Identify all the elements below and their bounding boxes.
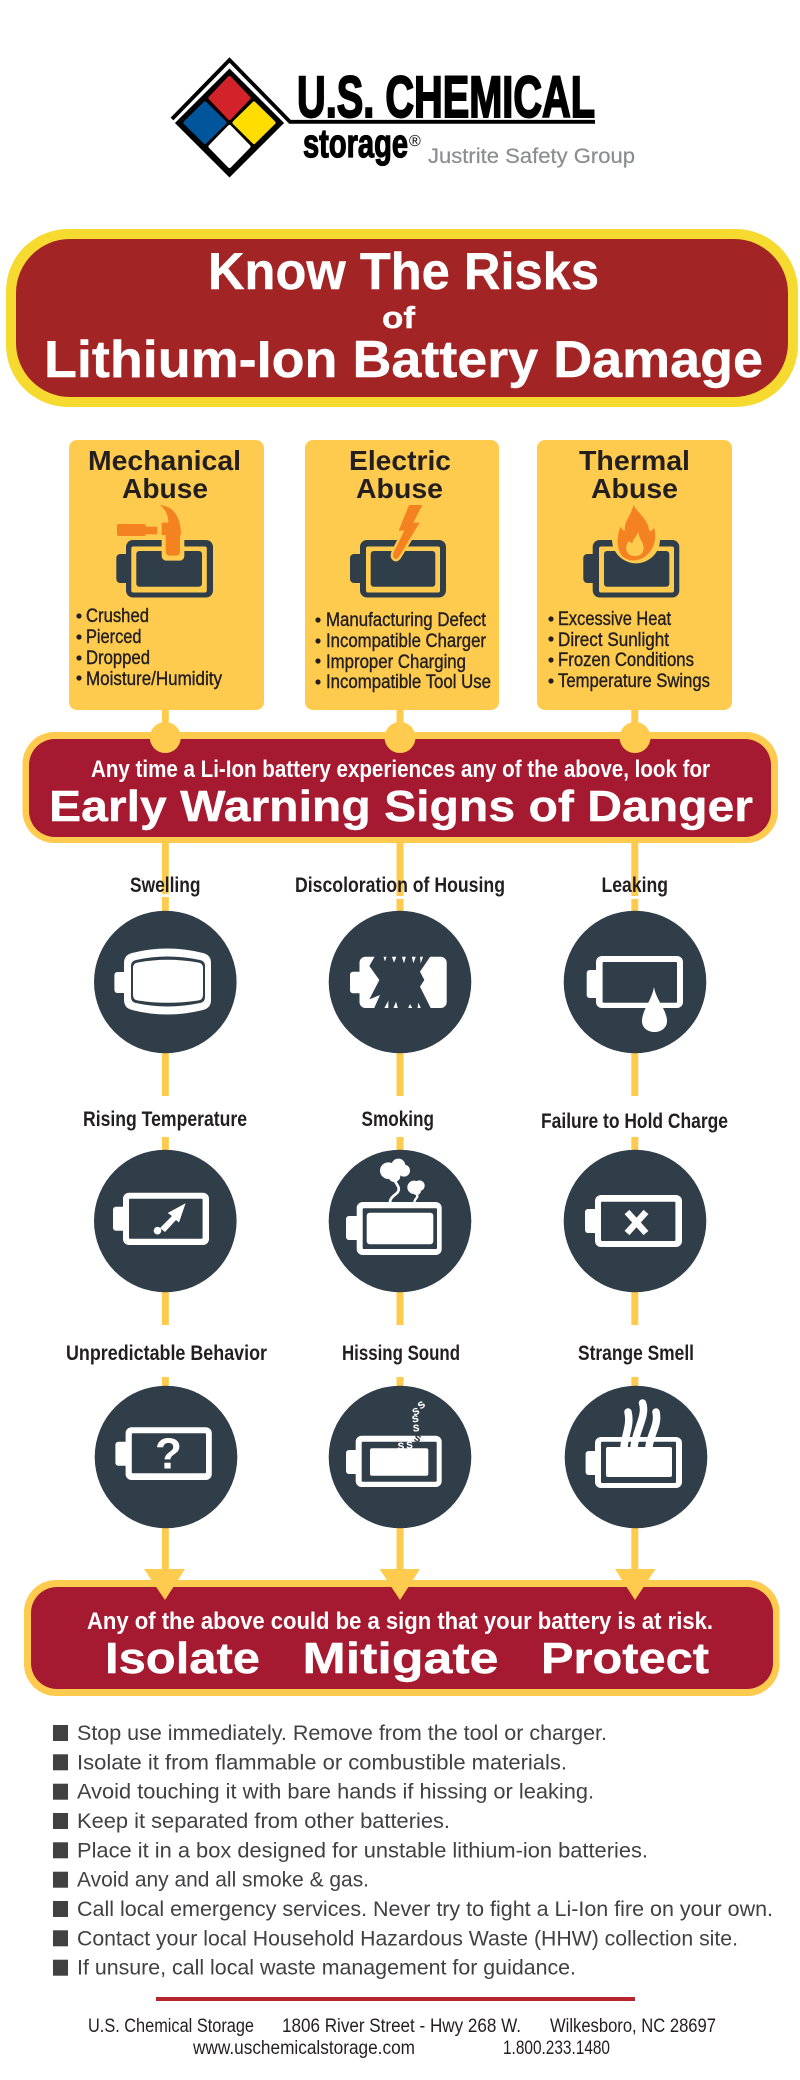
item 6: Avoid any and all smoke & gas. — [77, 1868, 369, 1892]
item 7: Call local emergency services. Never try to fight a Li-Ion fire on your own. — [77, 1897, 773, 1921]
banner: early warning signs — [22, 722, 778, 843]
connector dot right — [620, 722, 650, 753]
icon: hissing battery — [346, 1397, 442, 1487]
heading line 2: Abuse — [122, 473, 208, 504]
item 9: If unsure, call local waste management for guidance. — [77, 1956, 576, 1980]
list — [315, 609, 491, 693]
action: mitigate: Mitigate — [302, 1634, 498, 1683]
icon circle — [329, 911, 471, 1053]
arrow centre — [380, 1569, 420, 1600]
list: Incompatible Tool Use — [326, 671, 491, 693]
label: Rising Temperature — [83, 1108, 247, 1131]
connector dot centre — [384, 722, 416, 753]
logo: U.S. Chemical Storage — [172, 60, 635, 175]
list: Temperature Swings — [558, 670, 710, 692]
heading: Thermal — [579, 445, 690, 476]
panel: electric abuse — [305, 440, 499, 710]
label: Unpredictable Behavior — [66, 1342, 267, 1365]
parent company: Justrite Safety Group — [428, 145, 635, 168]
list: Pierced — [86, 626, 142, 648]
title line 1: Know The Risks — [208, 243, 599, 301]
label: Leaking — [602, 874, 668, 897]
icon circle — [94, 911, 237, 1053]
city: Wilkesboro, NC 28697 — [550, 2016, 716, 2037]
list: Crushed — [86, 605, 149, 627]
website: www.uschemicalstorage.com — [192, 2038, 415, 2059]
item 5: Place it in a box designed for unstable lithium-ion batteries. — [77, 1838, 648, 1862]
label: Hissing Sound — [342, 1342, 460, 1365]
list: Frozen Conditions — [558, 649, 694, 671]
action checklist — [53, 1721, 773, 1980]
title banner — [6, 229, 798, 407]
action: protect: Protect — [541, 1634, 709, 1683]
sign: leaking — [564, 874, 706, 1053]
list: Improper Charging — [326, 651, 466, 673]
list: Manufacturing Defect — [326, 609, 486, 631]
list: Direct Sunlight — [558, 629, 670, 651]
phone: 1.800.233.1480 — [503, 2038, 610, 2059]
wordmark: U.S. CHEMICAL — [297, 65, 595, 130]
icon circle — [564, 911, 706, 1053]
icon circle — [95, 1386, 237, 1528]
icon circle — [329, 1386, 471, 1528]
icon: hissing battery: s — [413, 1420, 420, 1434]
banner intro: Any time a Li-Ion battery experiences any of the above, look for — [91, 756, 710, 783]
arrow right — [615, 1569, 656, 1600]
icon: hissing battery: s — [397, 1438, 404, 1452]
list: Excessive Heat — [558, 608, 671, 630]
item 4: Keep it separated from other batteries. — [77, 1809, 450, 1833]
banner heading: Early Warning Signs of Danger — [49, 782, 753, 831]
sign: hissing sound — [329, 1342, 471, 1528]
connector dot left — [150, 722, 181, 753]
icon: leaking battery — [587, 956, 683, 1032]
arrow left — [144, 1569, 185, 1600]
icon circle — [565, 1386, 707, 1528]
icon circle — [329, 1150, 471, 1292]
item 8: Contact your local Household Hazardous Waste (HHW) collection site. — [77, 1926, 738, 1950]
sign: rising temperature — [83, 1108, 247, 1292]
heading: Electric — [349, 445, 451, 476]
icon: battery struck by lightning — [350, 505, 446, 598]
icon circle — [94, 1150, 237, 1292]
label: Smoking — [362, 1108, 434, 1131]
list: Incompatible Charger — [326, 630, 486, 652]
item 3: Avoid touching it with bare hands if hissing or leaking. — [77, 1780, 594, 1804]
icon: battery on fire — [583, 505, 679, 598]
company name: U.S. Chemical Storage — [88, 2016, 254, 2037]
icon: hissing battery: s — [412, 1430, 423, 1445]
wordmark: storage: storage — [303, 122, 408, 166]
icon: smoking battery — [346, 1159, 442, 1255]
item 1: Stop use immediately. Remove from the tool or charger. — [77, 1721, 607, 1745]
icon: hissing battery: s — [410, 1411, 420, 1426]
label: Failure to Hold Charge — [541, 1110, 728, 1133]
sign: strange smell — [565, 1342, 707, 1528]
icon: hissing battery: s — [409, 1403, 422, 1419]
heading line 2: Abuse — [591, 473, 678, 504]
icon: hissing battery: s — [414, 1397, 428, 1412]
connector lines — [162, 705, 638, 1575]
icon: hazard diamond — [172, 60, 595, 175]
footer contact details — [88, 2016, 716, 2059]
icon: hissing battery: s — [406, 1438, 413, 1452]
heading: Mechanical — [88, 445, 241, 476]
title line 2: of — [382, 300, 416, 335]
item 2: Isolate it from flammable or combustible materials. — [77, 1750, 567, 1774]
street address: 1806 River Street - Hwy 268 W. — [282, 2016, 521, 2037]
heading line 2: Abuse — [356, 473, 443, 504]
action: isolate: Isolate — [105, 1634, 260, 1683]
icon: battery with question mark: ? — [155, 1430, 182, 1478]
icon: battery with rising arrow — [113, 1193, 209, 1245]
icon: battery struck by hammer — [116, 505, 213, 598]
icon: discoloured battery — [350, 956, 447, 1010]
icon: swollen battery — [114, 948, 211, 1014]
list: Moisture/Humidity — [86, 668, 222, 690]
label: Strange Smell — [578, 1342, 694, 1365]
icon: battery with question mark — [115, 1427, 212, 1480]
title line 3: Lithium-Ion Battery Damage — [44, 331, 763, 389]
sign: smoking — [329, 1108, 471, 1292]
label: Swelling — [130, 874, 200, 897]
sign: unpredictable behavior — [66, 1342, 267, 1528]
icon circle — [564, 1150, 706, 1292]
banner intro: Any of the above could be a sign that your battery is at risk. — [87, 1608, 713, 1635]
sign: discoloration of housing — [295, 874, 505, 1053]
icon: battery with cross — [585, 1195, 682, 1247]
banner: isolate mitigate protect — [24, 1569, 780, 1696]
list — [548, 608, 710, 692]
panel: thermal abuse — [537, 440, 732, 710]
sign: swelling — [94, 874, 237, 1053]
list: Dropped — [86, 647, 150, 669]
list — [76, 605, 222, 690]
registered mark: ® — [409, 133, 421, 150]
label: Discoloration of Housing — [295, 874, 505, 897]
sign: failure to hold charge — [541, 1110, 728, 1292]
panel: mechanical abuse — [69, 440, 264, 710]
icon: smelly battery — [586, 1403, 682, 1488]
